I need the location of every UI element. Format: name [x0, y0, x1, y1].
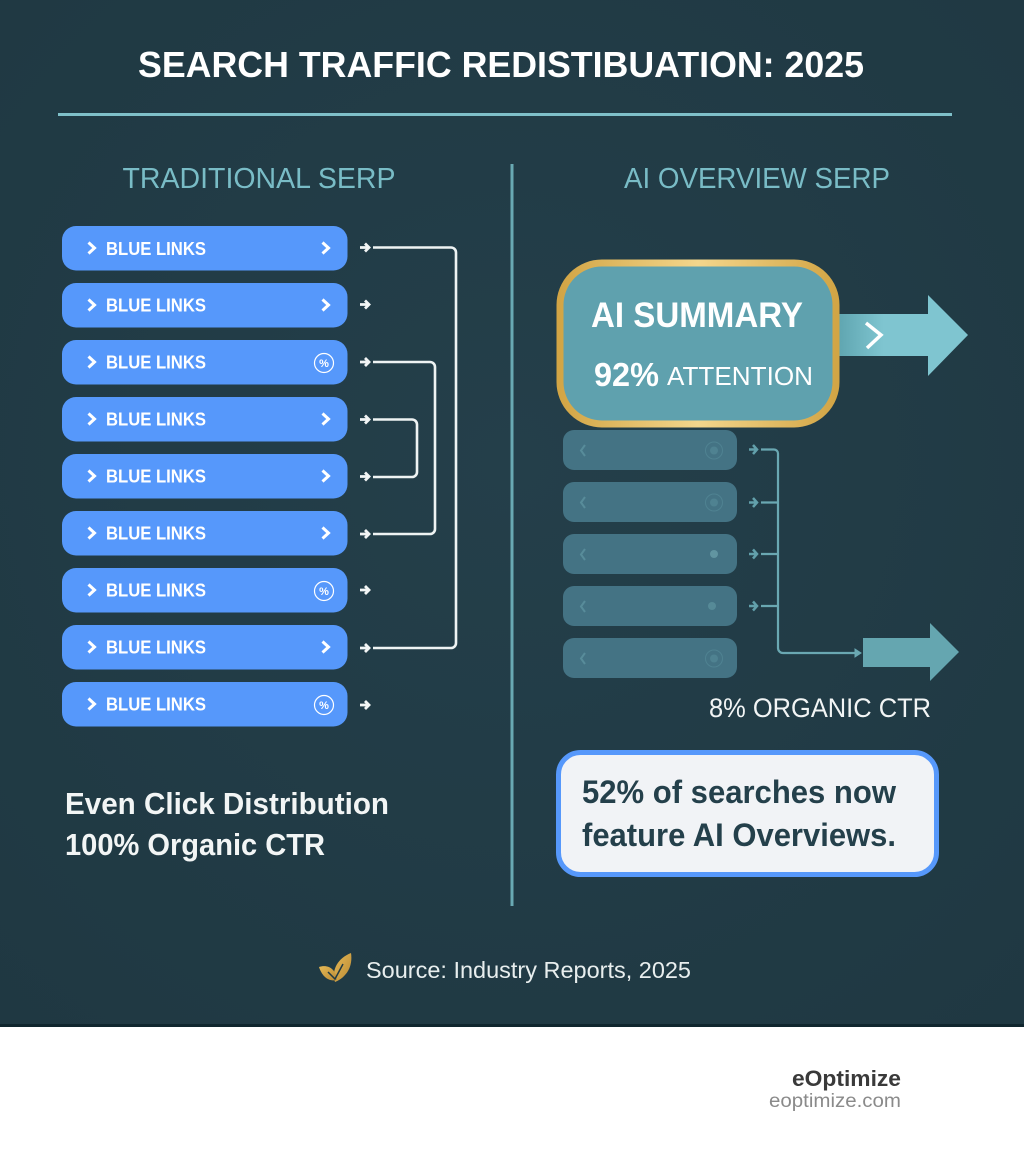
arrow: organic CTR: [863, 623, 959, 681]
panel: AI summary: ATTENTION: [667, 361, 813, 391]
heading: traditional SERP: TRADITIONAL SERP: [122, 163, 396, 195]
label: organic CTR: 8% ORGANIC CTR: [709, 693, 931, 723]
faded result row 2: [563, 482, 737, 522]
blue link row 5: [62, 454, 348, 498]
blue link row 4: BLUE LINKS: [106, 410, 206, 430]
blue link row 8: BLUE LINKS: [106, 638, 206, 658]
brand footer: [769, 1066, 901, 1112]
blue link row 6: [62, 511, 348, 556]
arrow: AI summary attention: [838, 295, 968, 376]
blue link row 1: [62, 226, 348, 270]
panel: faded organic results: [563, 430, 737, 678]
blue link row 1: BLUE LINKS: [106, 239, 206, 259]
panel: traditional blue links list: [62, 226, 348, 726]
traditional SERP summary text: [65, 786, 389, 862]
arrows: row outputs: [360, 244, 369, 709]
blue link row 7: BLUE LINKS: [106, 580, 206, 600]
blue link row 2: [62, 283, 348, 328]
icon: gold leaf: [319, 953, 351, 982]
column divider: [510, 164, 514, 906]
faded result row 3: [563, 534, 737, 574]
blue link row 2: BLUE LINKS: [106, 296, 206, 316]
faded result row 5: [563, 638, 737, 678]
connector brackets: [373, 248, 456, 648]
faded result row 1: [563, 430, 737, 470]
blue link row 5: BLUE LINKS: [106, 466, 206, 486]
traditional SERP summary text: Even Click Distribution: [65, 786, 389, 821]
source note: Source: Industry Reports, 2025: [366, 957, 691, 983]
faded result row 4: [563, 586, 737, 626]
blue link row 3: [62, 340, 348, 384]
panel: AI summary: [560, 263, 836, 424]
blue link row 7: [62, 568, 348, 612]
brand footer: eoptimize.com: [769, 1091, 901, 1112]
blue link row 3: BLUE LINKS: [106, 352, 206, 372]
blue link row 9: BLUE LINKS: [106, 694, 206, 714]
blue link row 8: [62, 625, 348, 670]
heading: AI overview SERP: AI OVERVIEW SERP: [624, 163, 890, 195]
blue link row 9: [62, 682, 348, 726]
callout: AI Overviews share: [558, 752, 936, 874]
panel: AI summary: AI SUMMARY: [591, 296, 803, 335]
title: SEARCH TRAFFIC REDISTIBUATION: 2025: [138, 44, 864, 85]
panel: AI summary: 92%: [594, 356, 659, 393]
traditional SERP summary text: 100% Organic CTR: [65, 827, 325, 862]
blue link row 6: BLUE LINKS: [106, 524, 206, 544]
connector: faded results to organic arrow: [749, 445, 861, 657]
callout: AI Overviews share: feature AI Overviews.: [582, 817, 896, 853]
brand footer: eOptimize: [792, 1066, 901, 1091]
blue link row 4: [62, 397, 348, 442]
callout: AI Overviews share: 52% of searches now: [582, 774, 896, 810]
